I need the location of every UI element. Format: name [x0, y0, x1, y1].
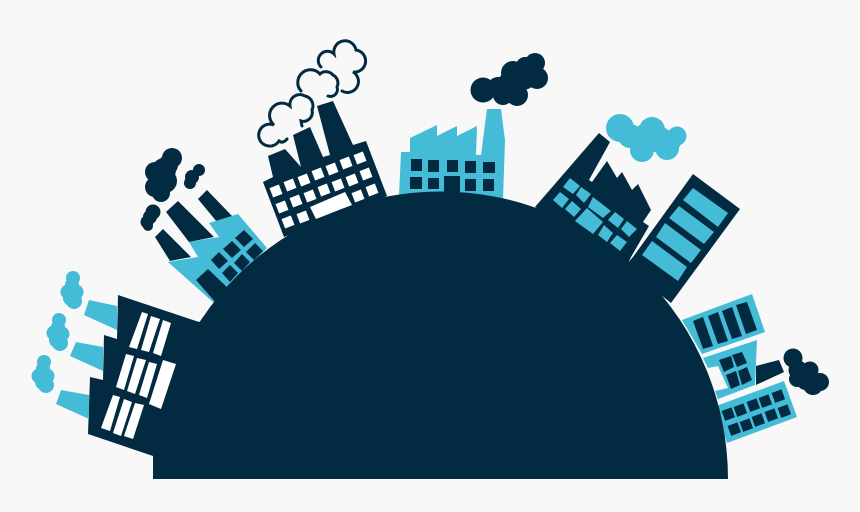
factory: dark building with white windows	[263, 101, 387, 237]
smoke: dark cloud, right	[784, 348, 829, 395]
smoke: teal puffs, left	[32, 271, 84, 393]
factory: teal sawtooth building with tall stack	[399, 109, 505, 200]
smoke: dark cloud above stack	[470, 53, 548, 106]
factory: teal office with dark chimney, right	[682, 294, 797, 443]
factory: dark building with white windows and teal chimneys, left	[56, 295, 215, 479]
smoke: outlined white clouds	[259, 41, 366, 146]
smoke: teal cloud	[606, 114, 686, 162]
planet	[153, 192, 728, 479]
factory: tall dark tower with teal windows	[625, 174, 740, 303]
factory: dark sawtooth building with teal windows	[535, 133, 651, 263]
smoke: dark clouds of teal factory	[140, 148, 205, 231]
factory: teal sawtooth building with dark chimneys	[155, 190, 267, 303]
